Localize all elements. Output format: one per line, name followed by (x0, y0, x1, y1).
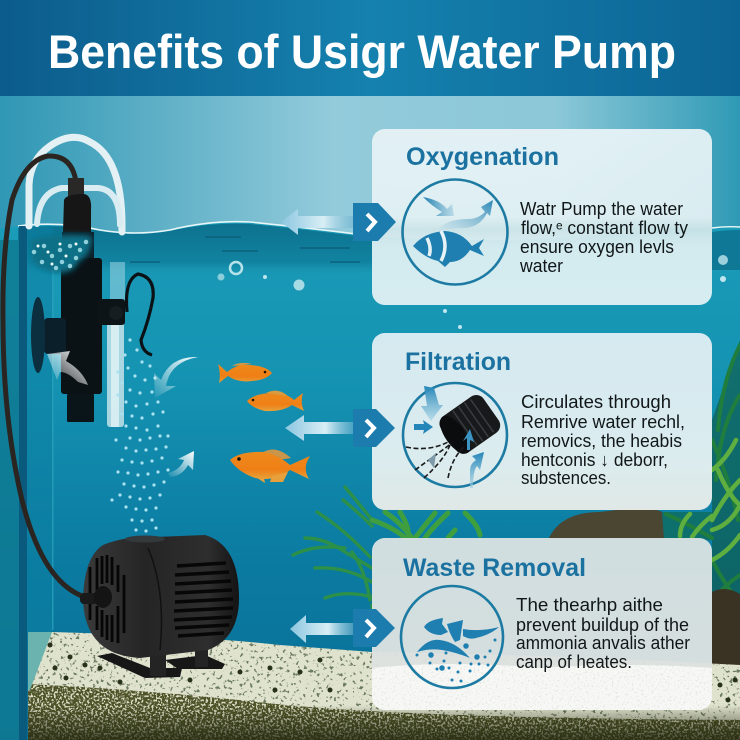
goldfish 1 (218, 363, 272, 383)
top nozzle (125, 536, 165, 542)
upper pump unit (31, 178, 125, 422)
description: substences. (521, 468, 611, 488)
description: The thearhp aithe (516, 595, 663, 615)
flow arrow to oxygenation (281, 209, 366, 235)
connector chevron (353, 609, 395, 647)
connector chevron (353, 203, 396, 241)
flow arrow to filtration (285, 415, 366, 441)
panel: filtration (353, 333, 712, 510)
description: removics, the heabis (521, 431, 682, 451)
title: Benefits of Usigr Water Pump (48, 25, 676, 78)
description: ensure oxygen levls (520, 237, 674, 257)
submersible power cable (3, 156, 96, 598)
description: canp of heates. (516, 652, 632, 672)
description (519, 199, 688, 276)
gravel top large pebbles (50, 645, 735, 700)
goldfish 2 (247, 391, 304, 411)
rocks (548, 508, 740, 668)
description: Watr Pump the water (520, 199, 683, 219)
flow arrow to waste removal (290, 615, 366, 643)
panel white gravel base (372, 664, 712, 710)
submersible pump (80, 535, 239, 678)
white return tubes (29, 137, 122, 232)
turbulence bubbles (30, 235, 728, 329)
header banner (0, 0, 740, 96)
pump feet (97, 645, 225, 678)
side vents (174, 563, 233, 636)
icon: filter cartridge (403, 383, 507, 488)
gravel bed (28, 632, 740, 740)
thin S cable (126, 274, 153, 355)
icon: fish with flow arrows (402, 180, 508, 284)
panel: waste removal (353, 538, 712, 710)
right side plants (660, 340, 740, 640)
heading: Waste Removal (403, 554, 586, 582)
heading: Oxygenation (406, 143, 559, 171)
flow arrow: curved up-right (168, 451, 194, 477)
goldfish 3 (230, 449, 310, 483)
flow arrow: curved down-left (154, 357, 198, 398)
front vents (90, 555, 124, 643)
description: hentconis ↓ deborr, (521, 450, 668, 470)
background: air above the water (0, 90, 740, 240)
description (521, 392, 685, 488)
glass tank wall (0, 226, 54, 740)
rising air bubble column (112, 340, 168, 531)
description: Remrive water rechl, (521, 412, 685, 432)
pump body (83, 535, 239, 658)
heading: Filtration (405, 348, 511, 376)
description: prevent buildup of the (516, 615, 689, 635)
description: flow,ᵉ constant flow ty (521, 218, 688, 238)
description: water (519, 256, 563, 276)
water surface band (18, 222, 740, 278)
joint seam (148, 548, 162, 650)
panel: oxygenation (353, 129, 712, 305)
description: ammonia anvalis ather (516, 633, 690, 653)
icon: waste particles (401, 586, 503, 688)
background: water (0, 222, 740, 740)
center plants (293, 487, 480, 628)
description (516, 595, 690, 672)
description: Circulates through (521, 392, 671, 412)
connector chevron (353, 409, 395, 447)
cable connector (80, 586, 112, 608)
clear outlet tube (107, 262, 125, 427)
white flow arrow near suction cup (47, 351, 88, 385)
